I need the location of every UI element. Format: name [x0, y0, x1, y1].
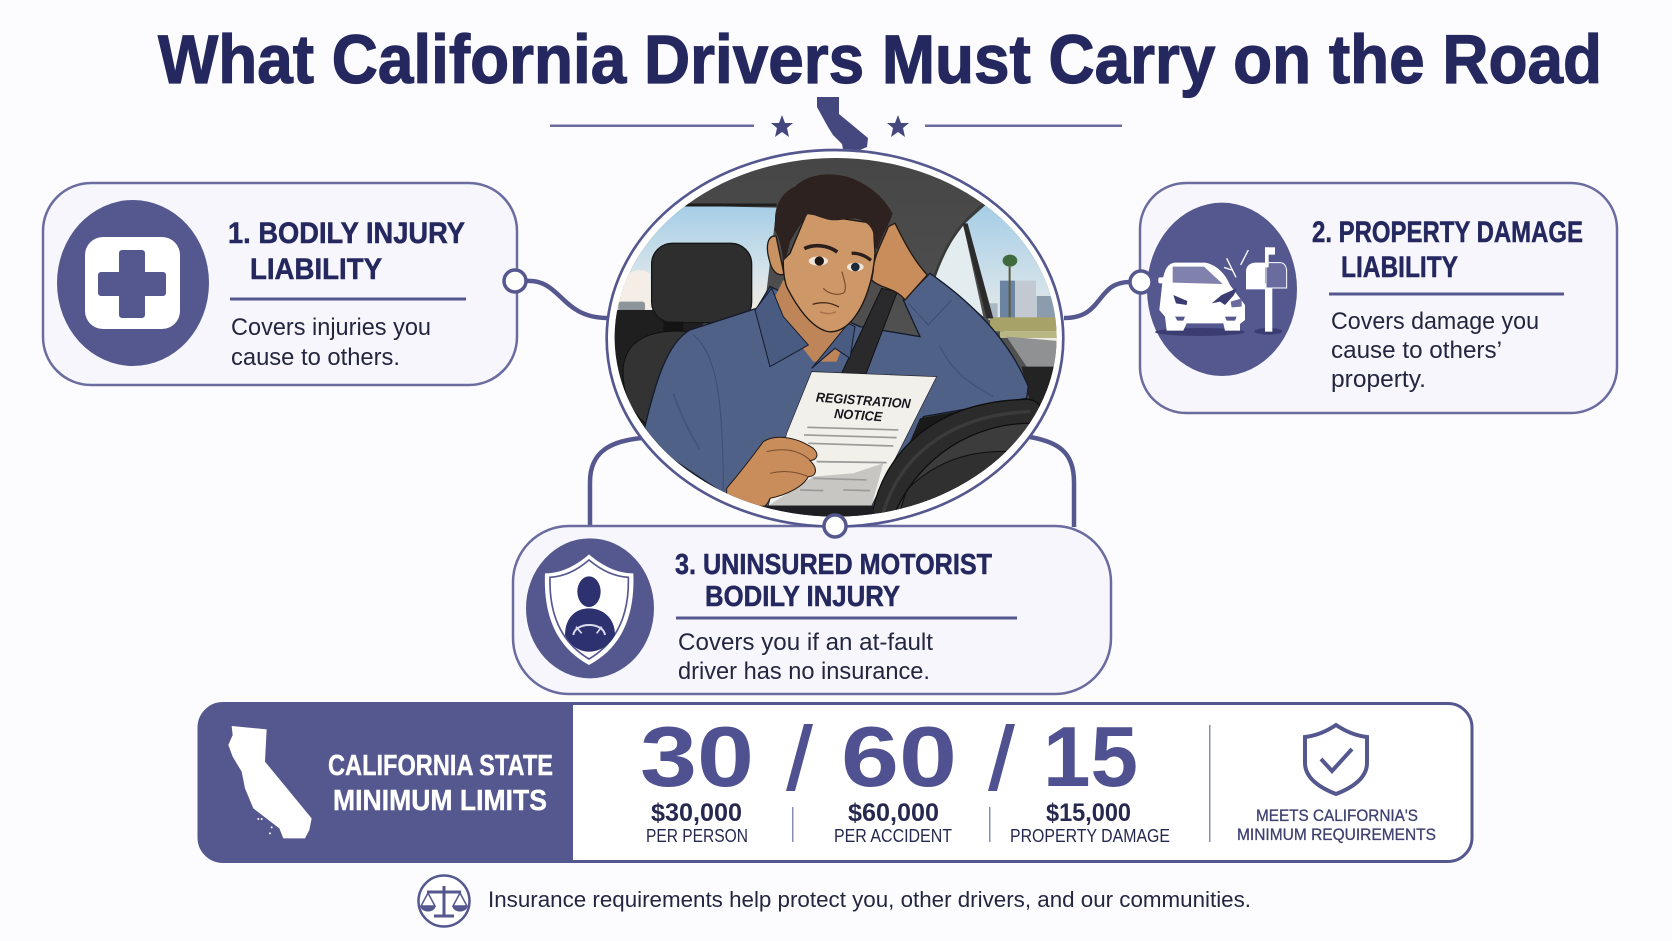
- heading: LIABILITY: [250, 253, 382, 286]
- heading: [1312, 216, 1583, 284]
- card 1: bodily injury liability: [43, 183, 526, 385]
- heading: LIABILITY: [1341, 251, 1458, 284]
- title: What California Drivers Must Carry on the Road: [158, 21, 1602, 98]
- limits 30/60/15: PER PERSON: [646, 826, 748, 846]
- illustration ring: [607, 150, 1063, 527]
- limits 30/60/15: [640, 710, 1210, 846]
- description: [231, 314, 431, 371]
- description: cause to others’: [1331, 337, 1502, 364]
- heading: 3. UNINSURED MOTORIST: [675, 549, 992, 581]
- central illustration: worried driver with registration notice: [600, 140, 1080, 540]
- header ornament: lines, stars, California: [550, 97, 1122, 150]
- card 2: property damage liability: [1130, 183, 1617, 413]
- limits 30/60/15: $60,000: [848, 799, 939, 827]
- limits 30/60/15: $15,000: [1046, 799, 1131, 827]
- central illustration: worried driver with registration notice: NOTICE: [834, 406, 884, 424]
- connectors between illustration and cards: [526, 281, 1130, 527]
- description: property.: [1331, 366, 1426, 393]
- icon: scales of justice: [418, 876, 470, 926]
- icon: shield check: [1305, 725, 1367, 794]
- registration notice: [768, 372, 937, 506]
- description: Covers damage you: [1331, 308, 1539, 335]
- compliance note: MINIMUM REQUIREMENTS: [1237, 825, 1436, 844]
- central illustration: worried driver with registration notice: REGISTRATION: [815, 390, 912, 411]
- heading: BODILY INJURY: [705, 581, 900, 613]
- icon: California map: [228, 726, 312, 838]
- description: Covers you if an at-fault: [678, 629, 933, 656]
- description: cause to others.: [231, 344, 400, 371]
- footer note with scales icon: [418, 876, 1251, 926]
- footer note with scales icon: Insurance requirements help protect you, other drivers, and our communities.: [488, 887, 1251, 912]
- black cabin behind wheel: [880, 398, 1038, 513]
- limits 30/60/15: PROPERTY DAMAGE: [1010, 826, 1170, 846]
- heading: 1. BODILY INJURY: [228, 217, 465, 250]
- driver's head: [755, 174, 927, 377]
- icon: damaged car and mailbox: [1147, 203, 1297, 376]
- heading: [228, 217, 465, 286]
- label block: [198, 703, 573, 862]
- limits 30/60/15: 60: [841, 710, 957, 805]
- icon: medical cross: [57, 200, 209, 366]
- heading: 2. PROPERTY DAMAGE: [1312, 216, 1583, 249]
- panel: California state minimum limits: [198, 703, 1472, 862]
- limits 30/60/15: 30: [640, 710, 754, 805]
- description: [678, 629, 933, 685]
- compliance note: MEETS CALIFORNIA'S: [1256, 806, 1418, 825]
- description: Covers injuries you: [231, 314, 431, 341]
- limits 30/60/15: PER ACCIDENT: [834, 826, 952, 846]
- icon: shield with driver: [526, 538, 654, 678]
- card 3: uninsured motorist bodily injury: [513, 526, 1111, 694]
- compliance note: [1237, 806, 1436, 844]
- label block: CALIFORNIA STATE: [328, 750, 553, 782]
- holding hand: [727, 437, 817, 512]
- label block: MINIMUM LIMITS: [333, 785, 547, 817]
- heading: [675, 549, 992, 613]
- steering wheel: [893, 423, 1030, 517]
- description: [1331, 308, 1539, 393]
- limits 30/60/15: $30,000: [651, 799, 742, 827]
- limits 30/60/15: 15: [1043, 710, 1138, 805]
- shirt: [643, 273, 1028, 518]
- description: driver has no insurance.: [678, 658, 930, 685]
